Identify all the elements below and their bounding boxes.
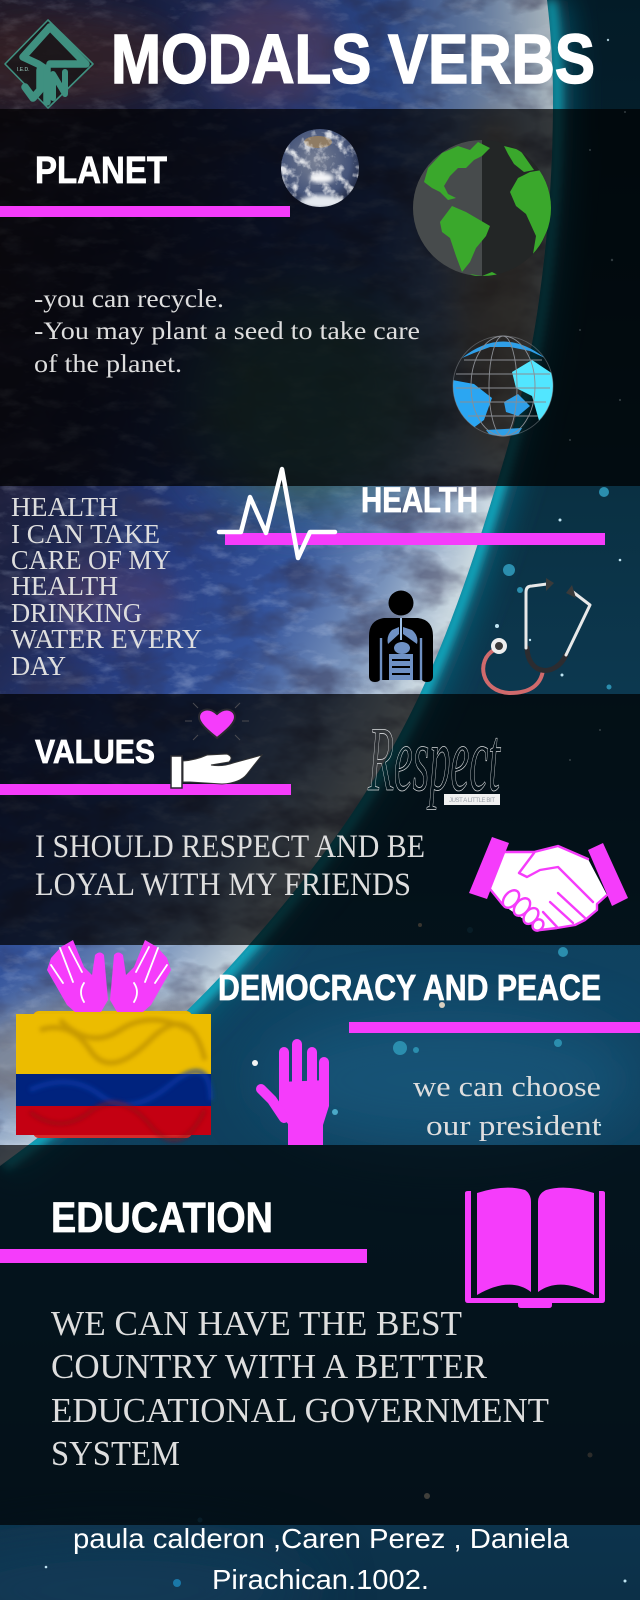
- icon: praying hands: [47, 940, 171, 1012]
- text: education: EDUCATIONAL GOVERNMENT: [51, 1391, 549, 1430]
- ribbon: just a little bit: JUST A LITTLE BIT: [449, 798, 495, 804]
- panel: planet section: [0, 129, 556, 438]
- ribbon: just a little bit: [444, 794, 500, 805]
- icon: earth photo: [281, 129, 359, 209]
- heading bar: education: [0, 1249, 367, 1263]
- text: health: HEALTH: [11, 492, 118, 522]
- text: democracy and peace: our president: [426, 1110, 601, 1142]
- panel: values band: [0, 694, 640, 945]
- text: education: COUNTRY WITH A BETTER: [51, 1347, 488, 1386]
- icon: open book: [465, 1188, 605, 1308]
- panel: democracy and peace section: [16, 940, 640, 1145]
- heading: health: HEALTH: [361, 481, 478, 520]
- heading: values: VALUES: [35, 734, 155, 771]
- heading bar: democracy and peace: [349, 1022, 640, 1033]
- panel: health section: [11, 469, 605, 693]
- panel: education section: [0, 1188, 605, 1473]
- icon: heartbeat line: [219, 469, 335, 558]
- icon: green globe: [413, 140, 552, 280]
- footer: authors: Pirachican.1002.: [212, 1564, 429, 1595]
- icon: human body organs: [369, 590, 433, 682]
- text: planet: -You may plant a seed to take care: [34, 318, 420, 345]
- text: values: LOYAL WITH MY FRIENDS: [35, 867, 411, 903]
- panel: values section: [0, 703, 628, 933]
- panel: header band shade: [0, 0, 640, 109]
- heading bar: health: [225, 533, 605, 545]
- icon: blue wire globe: [452, 336, 556, 438]
- text: health: CARE OF MY: [11, 545, 171, 575]
- logo: school emblem: [5, 20, 93, 108]
- icon: hand holding heart: [171, 703, 262, 788]
- text: democracy and peace: we can choose: [413, 1071, 601, 1103]
- heading bar: values: [0, 784, 291, 795]
- heading: planet: PLANET: [35, 150, 167, 192]
- text: planet: [34, 286, 420, 378]
- text: health: [11, 492, 202, 681]
- heading bar: planet: [0, 206, 290, 217]
- footer: authors: paula calderon ,Caren Perez , Daniela: [73, 1523, 570, 1554]
- text: health: WATER EVERY: [11, 624, 202, 654]
- text: education: SYSTEM: [51, 1434, 180, 1473]
- text: health: DAY: [11, 651, 66, 681]
- text: education: [51, 1304, 549, 1473]
- text: health: HEALTH: [11, 571, 118, 601]
- text: democracy and peace: [413, 1071, 601, 1142]
- icon: handshake: [469, 837, 628, 933]
- icon: colombian flag: [16, 1011, 211, 1140]
- text: health: I CAN TAKE: [11, 519, 160, 549]
- panel: education band: [0, 1145, 640, 1525]
- panel: planet band: [0, 109, 640, 486]
- heading: education: EDUCATION: [51, 1194, 273, 1242]
- text: planet: of the planet.: [34, 351, 182, 378]
- icon: raised hand: [261, 1044, 329, 1145]
- text: values: I SHOULD RESPECT AND BE: [35, 829, 425, 865]
- text: planet: -you can recycle.: [34, 286, 224, 313]
- text: values: [35, 829, 425, 903]
- footer: authors: [73, 1523, 570, 1595]
- icon: stethoscope: [483, 578, 590, 693]
- logo: school emblem: I.E.D.: [17, 67, 30, 73]
- text: health: DRINKING: [11, 598, 142, 628]
- text: education: WE CAN HAVE THE BEST: [51, 1304, 462, 1343]
